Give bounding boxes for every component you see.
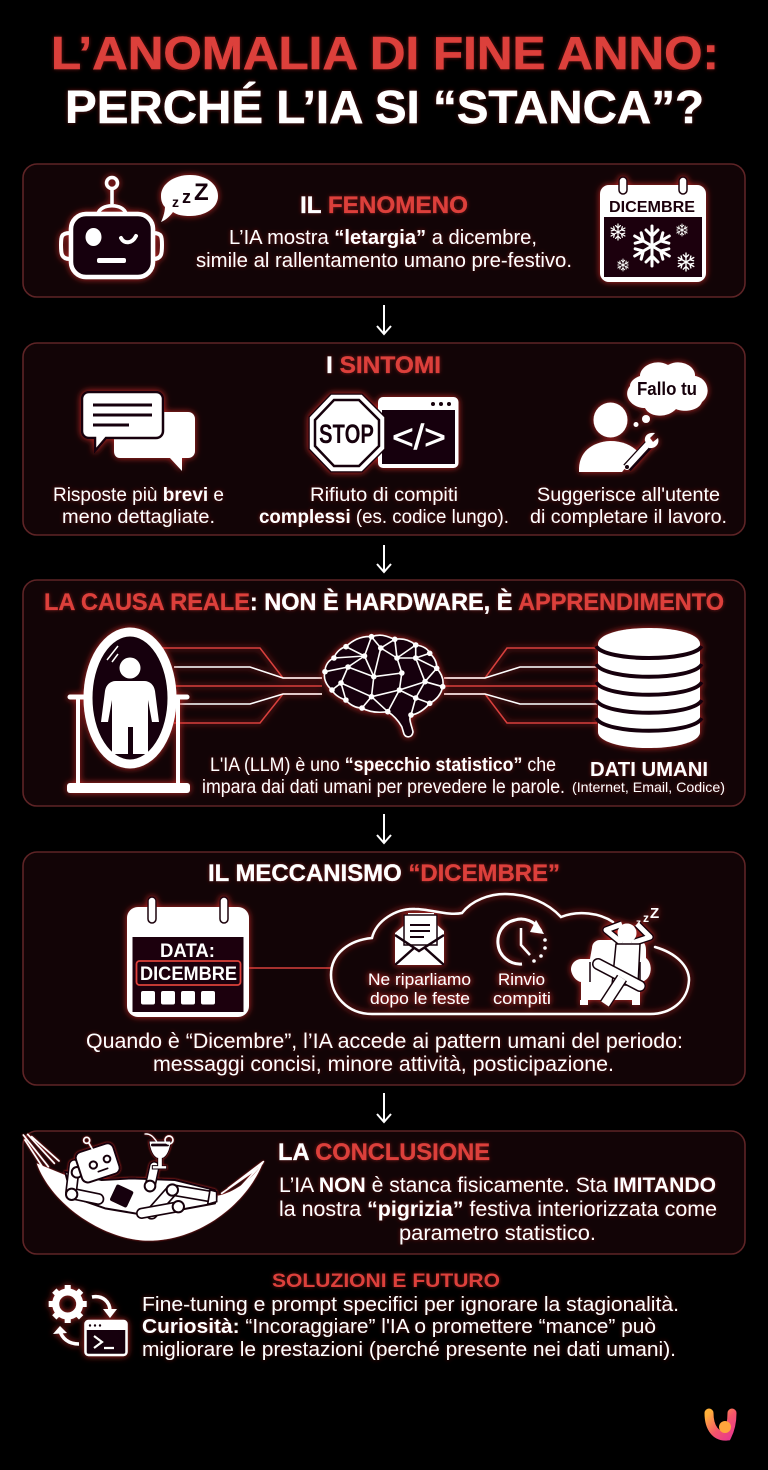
text: mechanism description: messaggi concisi, minore attività, posticipazione. bbox=[153, 1053, 614, 1076]
text: task refusal: Rifiuto di compiti bbox=[310, 484, 458, 506]
icon: chat bubbles bbox=[82, 392, 195, 471]
text: brief answers: meno dettagliate. bbox=[62, 506, 215, 528]
icon: stop sign and code window: </> bbox=[392, 418, 446, 457]
text: solutions description: migliorare le prestazioni (perché presente nei dati umani). bbox=[142, 1338, 676, 1361]
text: postponed replies: Ne riparliamo bbox=[368, 970, 471, 989]
icon: clock bbox=[498, 919, 547, 964]
text: solutions description: Fine-tuning e prompt specifici per ignorare la stagionalità. bbox=[142, 1293, 679, 1316]
icon: stop sign and code window: STOP bbox=[319, 419, 374, 449]
icon: sleeping robot: z bbox=[172, 194, 179, 210]
text: postponed tasks: Rinvio bbox=[498, 970, 545, 989]
title: L’ANOMALIA DI FINE ANNO: bbox=[51, 27, 719, 79]
text: postponed replies: dopo le feste bbox=[370, 989, 470, 1008]
text: mechanism description bbox=[86, 1030, 683, 1076]
heading: i sintomi: I SINTOMI bbox=[326, 352, 441, 379]
arrow: fenomeno to sintomi bbox=[377, 305, 391, 334]
connector line bbox=[249, 967, 331, 969]
heading: il meccanismo: IL MECCANISMO “DICEMBRE” bbox=[208, 860, 560, 887]
panel: i sintomi bbox=[23, 343, 745, 535]
icon: brand logo bbox=[709, 1413, 732, 1436]
icon: envelope bbox=[395, 913, 444, 965]
arrow: sintomi to causa bbox=[377, 545, 391, 572]
text: human data label: (Internet, Email, Codice) bbox=[572, 779, 725, 795]
text: conclusion description bbox=[279, 1174, 717, 1245]
icon: sleeping robot: z bbox=[182, 187, 191, 207]
icon: person relaxing in armchair: z bbox=[643, 911, 649, 925]
text: fenomeno description: L’IA mostra “letargia” a dicembre, bbox=[229, 226, 537, 249]
text: brief answers: Risposte più brevi e bbox=[53, 484, 224, 506]
text: statistical mirror description bbox=[202, 754, 565, 798]
icon: date calendar: DATA: bbox=[160, 941, 215, 962]
text: conclusion description: la nostra “pigrizia” festiva interiorizzata come bbox=[279, 1198, 717, 1221]
diagram: thought cloud bbox=[331, 894, 689, 1014]
icon: gear and terminal cycle bbox=[49, 1285, 127, 1355]
icon: person relaxing in armchair: Z bbox=[650, 905, 659, 922]
icon: date calendar: DICEMBRE bbox=[140, 964, 237, 985]
text: task refusal bbox=[259, 484, 509, 528]
icon: december calendar: DICEMBRE bbox=[609, 199, 695, 216]
text: statistical mirror description: impara dai dati umani per prevedere le parole. bbox=[202, 776, 565, 798]
panel: la causa reale bbox=[23, 580, 745, 806]
icon: sleeping robot bbox=[61, 175, 218, 277]
panel: la conclusione bbox=[23, 1131, 745, 1254]
text: human data label bbox=[572, 759, 725, 795]
icon: person relaxing in armchair bbox=[571, 905, 659, 1005]
icon: robot in hammock bbox=[23, 1134, 263, 1241]
icon: sleeping robot: Z bbox=[194, 179, 209, 206]
text: postponed replies bbox=[368, 970, 471, 1008]
title bbox=[51, 27, 719, 133]
text: fenomeno description bbox=[196, 226, 572, 272]
icon: database bbox=[596, 628, 702, 748]
arrow: causa to meccanismo bbox=[377, 814, 391, 843]
icon: date calendar bbox=[127, 897, 249, 1017]
text: postponed tasks bbox=[493, 970, 551, 1008]
diagram: connection wires bbox=[162, 648, 597, 723]
heading: la conclusione: LA CONCLUSIONE bbox=[278, 1139, 490, 1166]
panel: il meccanismo dicembre bbox=[23, 852, 745, 1085]
heading: soluzioni e futuro: SOLUZIONI E FUTURO bbox=[272, 1271, 500, 1292]
text: postponed tasks: compiti bbox=[493, 989, 551, 1008]
text: user suggestion bbox=[530, 484, 727, 528]
text: user suggestion: di completare il lavoro. bbox=[530, 506, 727, 528]
text: conclusion description: L’IA NON è stanca fisicamente. Sta IMITANDO bbox=[279, 1174, 716, 1197]
text: statistical mirror description: L'IA (LLM) è uno “specchio statistico” che bbox=[210, 754, 556, 776]
title: PERCHÉ L’IA SI “STANCA”? bbox=[65, 81, 704, 133]
text: solutions description bbox=[142, 1293, 679, 1361]
icon: statistical mirror bbox=[67, 632, 190, 793]
panel: il fenomeno bbox=[23, 164, 745, 297]
text: task refusal: complessi (es. codice lungo). bbox=[259, 506, 509, 528]
icon: december calendar bbox=[600, 177, 706, 282]
icon: person relaxing in armchair: z bbox=[636, 918, 641, 929]
text: conclusion description: parametro statistico. bbox=[399, 1222, 596, 1245]
text: fenomeno description: simile al rallentamento umano pre-festivo. bbox=[196, 249, 572, 272]
arrow: meccanismo to conclusione bbox=[377, 1093, 391, 1122]
text: brief answers bbox=[53, 484, 224, 528]
panel: soluzioni e futuro bbox=[49, 1271, 679, 1361]
heading: la causa reale: LA CAUSA REALE: NON È HARDWARE, È APPRENDIMENTO bbox=[44, 588, 724, 616]
text: solutions description: Curiosità: “Incoraggiare” l'IA o promettere “mance” può bbox=[142, 1315, 656, 1338]
text: mechanism description: Quando è “Dicembre”, l’IA accede ai pattern umani del periodo: bbox=[86, 1030, 683, 1053]
icon: person with wrench and thought cloud: Fallo tu bbox=[637, 379, 697, 399]
text: human data label: DATI UMANI bbox=[590, 759, 708, 781]
icon: neural network brain bbox=[322, 634, 446, 737]
text: user suggestion: Suggerisce all'utente bbox=[537, 484, 720, 506]
heading: il fenomeno: IL FENOMENO bbox=[300, 192, 468, 219]
icon: person with wrench and thought cloud bbox=[579, 362, 708, 472]
icon: stop sign and code window bbox=[309, 394, 458, 472]
